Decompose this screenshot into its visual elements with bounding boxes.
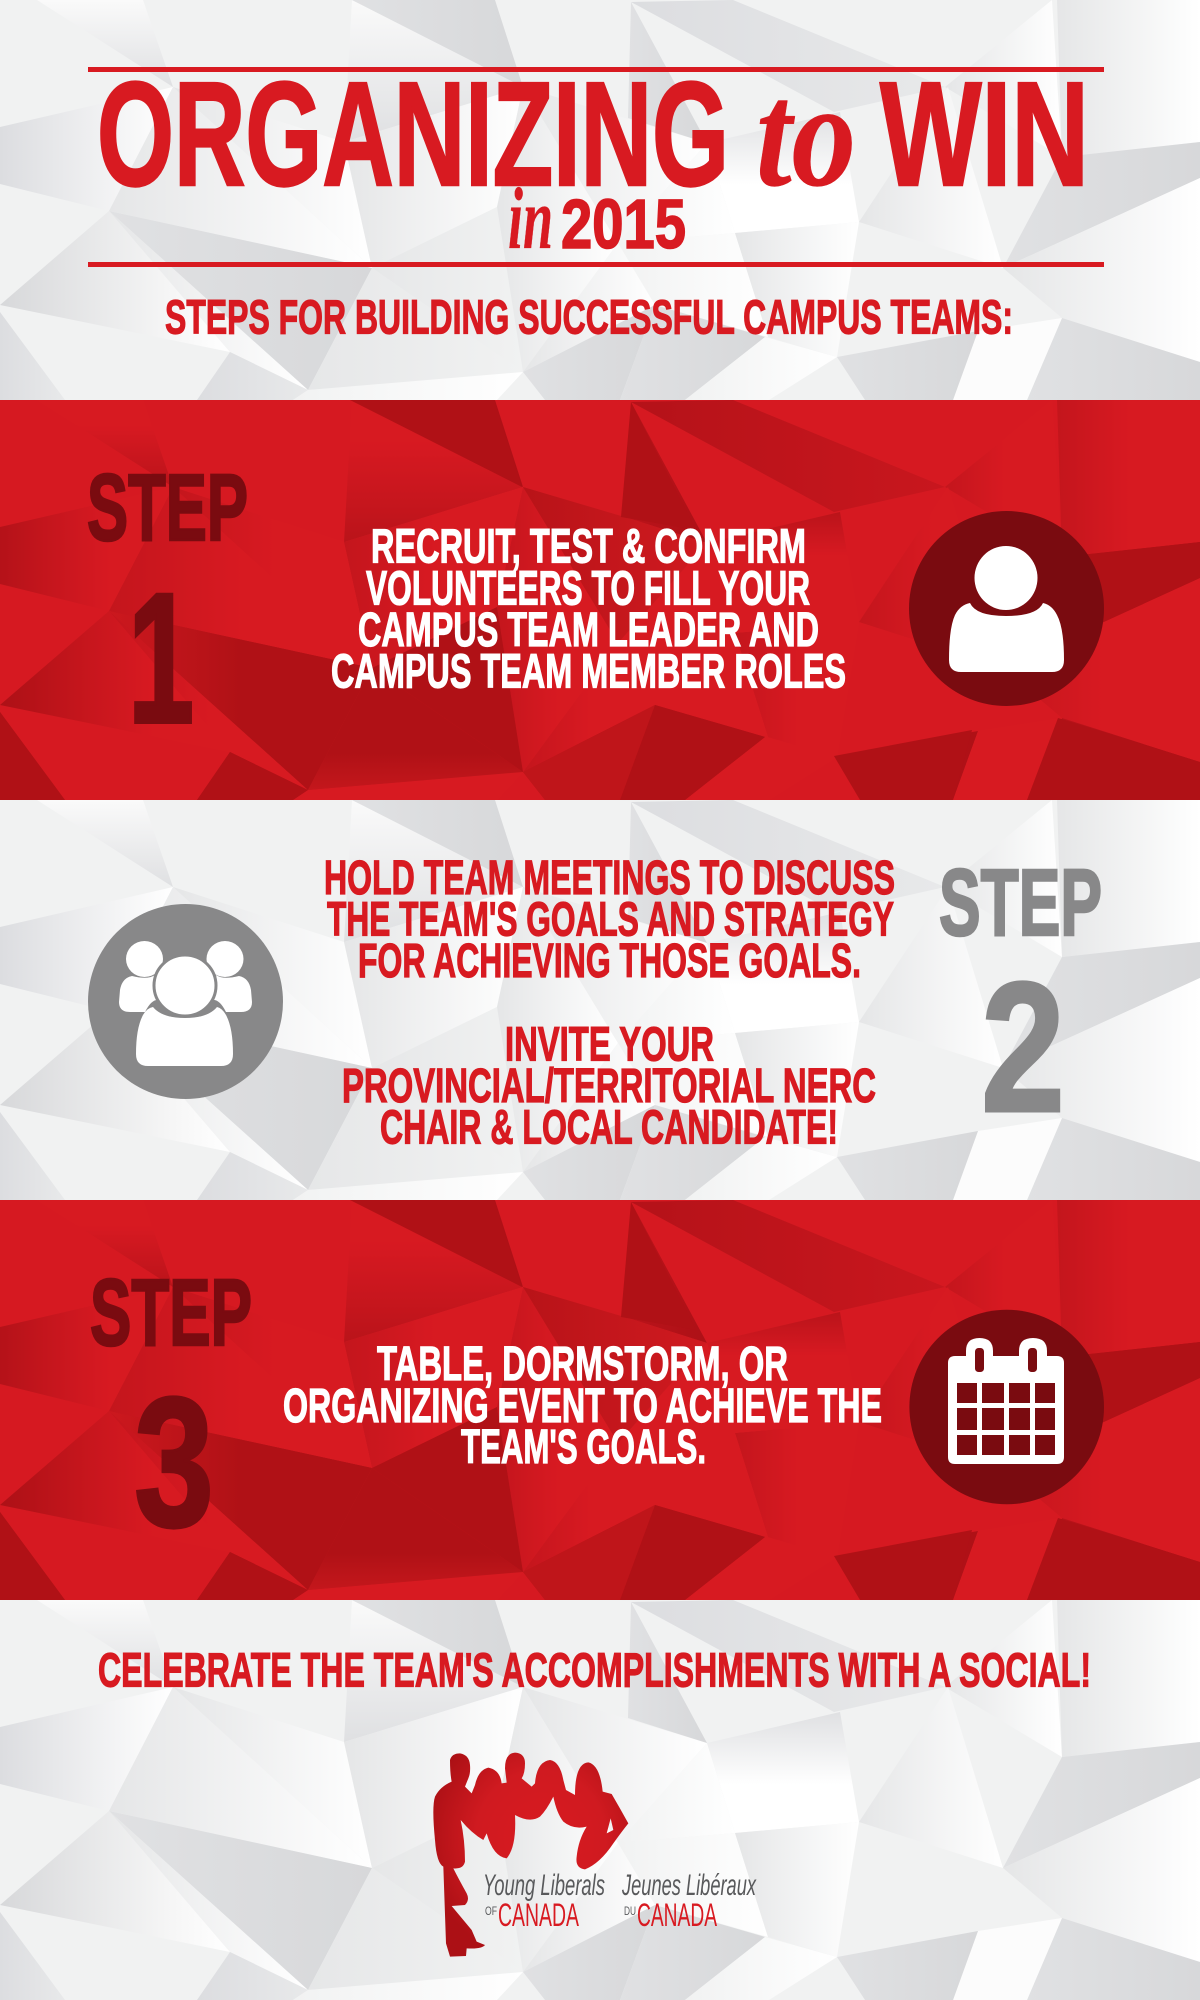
logo silhouette xyxy=(433,1753,628,1957)
logo text: english: Young Liberals xyxy=(483,1869,605,1902)
logo text: english xyxy=(483,1869,605,1933)
title: in: in xyxy=(508,171,553,268)
step 3 text: ORGANIZING EVENT TO ACHIEVE THE xyxy=(283,1380,882,1433)
step 2 text: CHAIR & LOCAL CANDIDATE! xyxy=(380,1102,838,1154)
step 1 text: CAMPUS TEAM LEADER AND xyxy=(358,604,819,657)
step 1 text: VOLUNTEERS TO FILL YOUR xyxy=(366,562,810,616)
title: year: 2015 xyxy=(561,185,686,263)
title: organizing: ORGANIZING xyxy=(97,52,729,217)
step 2 label: STEP xyxy=(939,850,1102,956)
panel: footer background xyxy=(0,1600,1200,2000)
panel: step 3 background xyxy=(0,1200,1200,1600)
step 2 text: INVITE YOUR xyxy=(505,1018,714,1072)
logo text: french: DU xyxy=(624,1904,636,1918)
logo text: french: Jeunes Libéraux xyxy=(621,1869,757,1902)
logo: young liberals of canada xyxy=(433,1753,757,1957)
panel: step 1 background xyxy=(0,400,1200,800)
title: win: WIN xyxy=(880,52,1089,217)
step 3 label: 3 xyxy=(134,1360,214,1566)
step 2 text: HOLD TEAM MEETINGS TO DISCUSS xyxy=(324,852,895,905)
step 1 text xyxy=(331,520,846,698)
panel: step 2 background xyxy=(0,800,1200,1200)
step 1 text: RECRUIT, TEST & CONFIRM xyxy=(371,520,806,574)
panel: header background xyxy=(0,0,1200,400)
title: to: to xyxy=(756,52,856,218)
step 3 label: STEP xyxy=(90,1260,252,1366)
step 3 label xyxy=(90,1260,252,1566)
step 1 label: 1 xyxy=(128,556,194,762)
logo text: french: CANADA xyxy=(637,1897,717,1933)
step 2 text xyxy=(324,852,895,1154)
step 3 text: TABLE, DORMSTORM, OR xyxy=(377,1338,788,1391)
step 2 text: PROVINCIAL/TERRITORIAL NERC xyxy=(342,1060,876,1113)
title block xyxy=(88,52,1104,268)
step 2 label: 2 xyxy=(981,945,1065,1151)
step 3 text xyxy=(283,1338,882,1474)
logo text: english: CANADA xyxy=(498,1897,579,1933)
step 2 text: THE TEAM'S GOALS AND STRATEGY xyxy=(327,894,894,946)
logo text: french xyxy=(621,1869,757,1933)
step 1 text: CAMPUS TEAM MEMBER ROLES xyxy=(331,646,846,698)
step 1 label: STEP xyxy=(87,455,248,561)
icon: group xyxy=(88,904,283,1099)
step 2 label xyxy=(939,850,1102,1151)
step 1 label xyxy=(87,455,248,762)
step 3 text: TEAM'S GOALS. xyxy=(461,1421,706,1474)
icon: person xyxy=(909,511,1104,706)
logo text: english: OF xyxy=(485,1904,497,1918)
icon: calendar xyxy=(909,1310,1104,1504)
step 2 text: FOR ACHIEVING THOSE GOALS. xyxy=(358,935,861,988)
